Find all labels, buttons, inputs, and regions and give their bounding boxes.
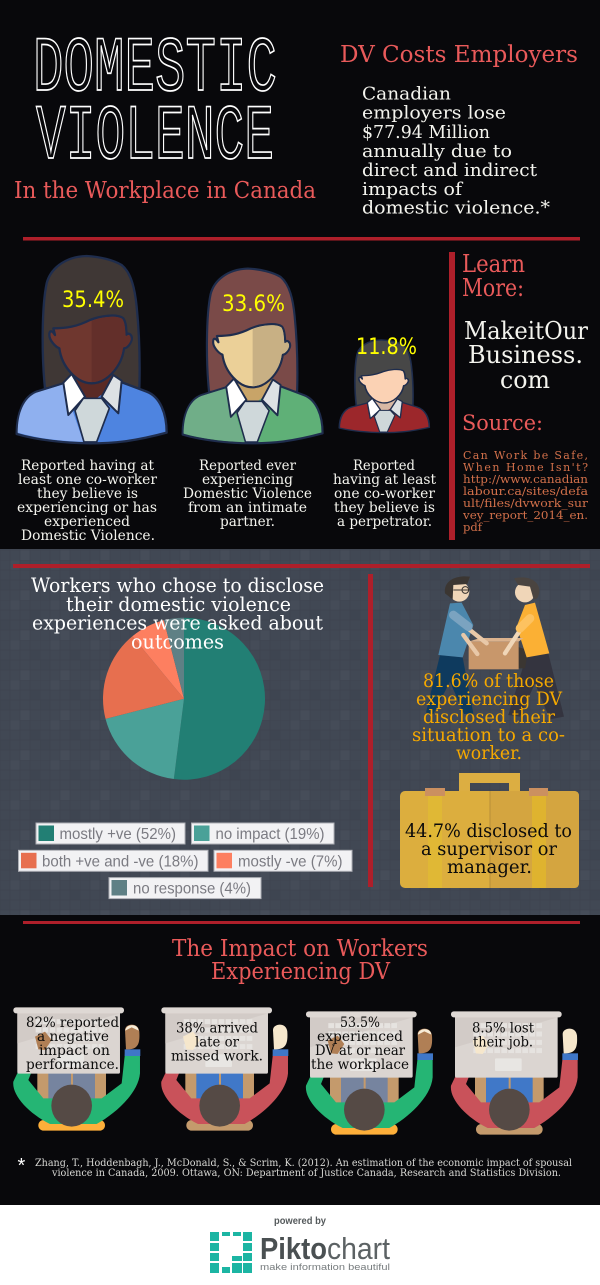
icon: briefcase [400, 773, 579, 888]
caption: person 3: one co-worker [334, 486, 436, 502]
text: 82% [26, 1015, 119, 1073]
legend item: mostly negative: mostly -ve (7%) [238, 853, 342, 870]
source citation: When Home Isn't? [463, 461, 588, 474]
caption: person 1: Domestic Violence. [21, 528, 155, 544]
heading: impact on workers [172, 936, 428, 985]
text block: cost paragraph: annually due to [362, 141, 512, 162]
pie chart [103, 618, 265, 780]
text: co-worker disclosure [412, 670, 565, 764]
text block: cost paragraph: $77.94 Million [362, 122, 490, 143]
citation line 2: violence in Canada, 2009. Ottawa, ON: Department of Justice Canada, Research and Statistics Division. [51, 1168, 561, 1179]
link text: com [500, 366, 550, 394]
panel: learn more and source [462, 250, 589, 534]
icon: worker 4 at laptop [451, 1011, 578, 1135]
text: 38%: late or [195, 1034, 240, 1050]
powered by: powered by [274, 1216, 326, 1227]
caption: person 1 [17, 458, 158, 544]
caption: person 1: experiencing or has [17, 500, 157, 516]
text: 38%: 38% arrived [176, 1020, 258, 1036]
citation line 1: Zhang, T., Hoddenbagh, J., McDonald, S., & Scrim, K. (2012). An estimation of the economic impact of spousal [35, 1158, 572, 1169]
footer: Piktochart logo: chart [327, 1231, 390, 1266]
caption: person 3: a perpetrator. [337, 514, 432, 530]
heading: DV costs employers: DV Costs Employers [340, 42, 578, 68]
text: co-worker disclosure: worker. [456, 742, 522, 764]
heading: learn more: More: [462, 274, 524, 302]
text: 38% [171, 1020, 263, 1064]
heading: learn more: Learn [462, 250, 525, 278]
legend item: mostly negative [214, 850, 352, 871]
heading: disclosure outcomes: Workers who chose to disclose [31, 573, 324, 597]
legend item: no response: no response (4%) [133, 881, 251, 898]
logo mark [210, 1232, 252, 1273]
caption: person 1: they believe is [37, 486, 138, 502]
text block: cost paragraph: direct and indirect [362, 160, 538, 181]
footnote [18, 1155, 572, 1179]
text: co-worker disclosure: disclosed their [423, 706, 556, 728]
text: 8.5%: 8.5% lost [472, 1020, 535, 1036]
heading: disclosure outcomes [31, 573, 324, 654]
stat: 11.8%: 11.8% [356, 335, 417, 360]
title [33, 26, 277, 182]
subtitle: In the Workplace in Canada [14, 178, 316, 204]
source citation [462, 449, 589, 534]
icon: worker 1 at laptop [13, 1007, 140, 1131]
caption: person 2 [183, 458, 312, 530]
text: co-worker disclosure: 81.6% of those [423, 670, 554, 692]
text block: cost paragraph: Canadian [362, 84, 451, 104]
patterned middle band [0, 549, 600, 915]
footer band [0, 1205, 600, 1285]
caption: person 1: experienced [44, 514, 130, 530]
icon: two people carrying a box [426, 576, 564, 719]
legend [18, 823, 352, 899]
source citation: ult/files/dvwork_sur [463, 497, 589, 510]
text: co-worker disclosure: experiencing DV [416, 688, 562, 710]
icon: person 3 [339, 340, 429, 433]
caption: person 3 [333, 458, 437, 530]
bottom dark band [0, 915, 600, 1205]
footnote asterisk: * [18, 1155, 26, 1177]
page background top [0, 0, 600, 549]
legend item: both: both +ve and -ve (18%) [42, 853, 198, 870]
source citation: vey_report_2014_en. [462, 509, 588, 522]
link text [464, 317, 588, 394]
footer: Piktochart logo [210, 1216, 390, 1273]
caption: person 3: having at least [333, 472, 437, 488]
heading: source: Source: [462, 411, 543, 435]
legend item: no impact [192, 823, 334, 844]
caption: person 2: Domestic Violence [183, 486, 312, 502]
legend item: mostly positive [36, 823, 185, 844]
text: supervisor disclosure: 44.7% disclosed to [405, 820, 572, 842]
icon: person 1 [17, 256, 167, 443]
title: VIOLENCE [36, 94, 274, 182]
source citation: http://www.canadian [463, 473, 588, 486]
legend item: no response [109, 878, 261, 899]
caption: person 2: from an intimate [188, 500, 307, 516]
text: 53.5%: the workplace [311, 1057, 409, 1073]
text: 38%: missed work. [171, 1048, 263, 1064]
text: supervisor disclosure: a supervisor or [421, 838, 558, 860]
link text: Business. [468, 341, 583, 369]
heading: learn more [462, 250, 525, 302]
text: 53.5%: experienced [317, 1029, 403, 1045]
caption: person 1: least one co-worker [18, 472, 158, 488]
tagline: make information beautiful [260, 1262, 390, 1273]
icon: worker 2 at laptop [161, 1007, 288, 1131]
caption: person 3: Reported [353, 458, 415, 474]
source citation: pdf [463, 521, 483, 534]
heading: disclosure outcomes: outcomes [131, 630, 224, 654]
text block: cost paragraph [362, 84, 550, 218]
text: 53.5%: DV at or near [315, 1043, 406, 1059]
caption: person 3: they believe is [334, 500, 435, 516]
heading: disclosure outcomes: their domestic violence [66, 592, 291, 616]
text: 82%: 82% reported [26, 1015, 119, 1031]
icon: person 2 [183, 269, 323, 443]
text: 53.5%: 53.5% [340, 1015, 380, 1031]
source citation: Can Work be Safe, [463, 449, 588, 462]
text: co-worker disclosure: situation to a co- [412, 724, 565, 746]
text block: cost paragraph: impacts of [362, 179, 463, 200]
text: 53.5% [311, 1015, 409, 1073]
heading: disclosure outcomes: experiences were asked about [32, 610, 323, 634]
heading: impact on workers: Experiencing DV [211, 959, 390, 985]
text: supervisor disclosure: manager. [447, 856, 532, 878]
text: 82%: a negative [37, 1029, 109, 1045]
stat: 35.4%: 35.4% [62, 288, 124, 313]
title: DOMESTIC [33, 26, 277, 114]
icon: worker 3 at laptop [306, 1011, 433, 1135]
text block: cost paragraph: domestic violence.* [362, 198, 550, 218]
legend item: no impact: no impact (19%) [216, 826, 324, 843]
text: supervisor disclosure [405, 820, 572, 878]
text: 8.5% [472, 1020, 535, 1050]
text block: cost paragraph: employers lose [362, 102, 506, 124]
caption: person 2: Reported ever [199, 458, 297, 474]
text: 82%: performance. [26, 1057, 119, 1073]
text: 8.5%: their job. [473, 1034, 533, 1050]
legend item: mostly positive: mostly +ve (52%) [60, 826, 176, 843]
text: 82%: impact on [39, 1043, 110, 1059]
stat: 33.6%: 33.6% [222, 292, 285, 317]
wordmark: Pikto [260, 1231, 327, 1266]
heading: impact on workers: The Impact on Workers [172, 936, 428, 962]
caption: person 1: Reported having at [21, 458, 155, 474]
link text: MakeitOur [464, 317, 588, 345]
caption: person 2: partner. [220, 514, 275, 530]
source citation: labour.ca/sites/defa [463, 485, 589, 498]
caption: person 2: experiencing [202, 472, 293, 488]
